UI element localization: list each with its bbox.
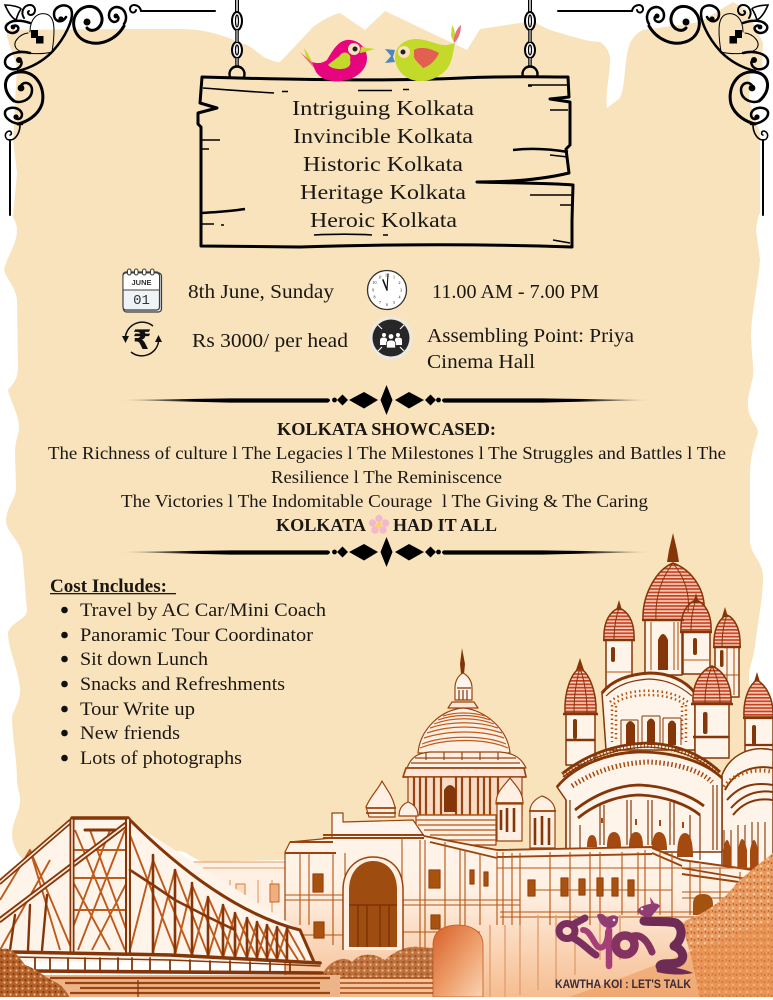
dome — [418, 708, 510, 753]
dome finials — [576, 533, 760, 682]
list items — [80, 600, 327, 769]
list items: Panoramic Tour Coordinator — [80, 625, 314, 646]
title text: Heroic Kolkata — [310, 208, 457, 232]
logo glyph: third letter — [616, 936, 652, 954]
spire and lantern — [460, 648, 465, 674]
railing and main body — [557, 752, 722, 852]
logo glyph: first letter — [559, 918, 596, 955]
list bullets — [61, 607, 68, 761]
white ground under the skyline — [0, 850, 773, 1000]
icon: clock: 9 — [372, 288, 374, 292]
trees left — [0, 949, 70, 998]
showcase text block: Resilience l The Reminiscence — [271, 467, 502, 487]
icon: rupee exchange — [122, 322, 162, 356]
stone pier — [433, 925, 483, 997]
building windows — [313, 870, 634, 938]
orange trees right — [680, 853, 773, 1000]
logo glyph: second letter — [583, 930, 609, 966]
corner ornament: top right — [558, 5, 768, 215]
title text: Intriguing Kolkata — [292, 96, 475, 120]
icon: clock: 6 — [386, 302, 388, 307]
annex — [722, 749, 773, 880]
lower left tower — [566, 713, 595, 765]
meeting point text: Cinema Hall — [427, 351, 535, 373]
shaded lower right wash — [560, 920, 773, 1000]
meeting point text: Assembling Point: Priya — [427, 325, 634, 347]
lower wall streaks — [490, 915, 620, 997]
Howrah bridge — [0, 818, 340, 998]
icon: clock: 11 — [378, 274, 382, 280]
hedge — [323, 947, 433, 978]
cost includes list — [50, 576, 327, 769]
list items: Snacks and Refreshments — [80, 674, 285, 695]
meeting point text — [427, 325, 634, 373]
tower detail lines — [606, 622, 739, 695]
tower windows — [611, 634, 724, 670]
title text: Historic Kolkata — [303, 152, 464, 176]
showcase text block: KOLKATA — [276, 515, 366, 535]
bird: pink — [300, 38, 375, 81]
icon: calendar — [123, 269, 162, 312]
temple windows and arches — [587, 818, 693, 857]
time text: 11.00 AM - 7.00 PM — [432, 281, 599, 303]
Dakshineswar temple — [557, 533, 773, 880]
water below the bridge — [40, 975, 340, 998]
logo: Kawtha Koi — [555, 897, 693, 991]
drum band — [407, 752, 526, 768]
wing walls — [285, 813, 753, 1000]
logo bird: large — [637, 897, 660, 917]
logo tagline: KAWTHA KOI : LET'S TALK — [555, 979, 692, 991]
river bands — [290, 978, 433, 993]
title text — [292, 96, 475, 232]
list items: Sit down Lunch — [80, 649, 209, 670]
illustration: Kolkata skyline — [0, 533, 773, 1000]
dome base rings — [603, 620, 741, 647]
divider: lower — [120, 537, 652, 567]
list items: New friends — [80, 723, 180, 744]
dome ribs — [614, 563, 727, 647]
date text: 8th June, Sunday — [188, 281, 335, 303]
hanging sign — [198, 0, 573, 247]
icon: rupee exchange: ₹ — [133, 325, 151, 356]
icon: clock: 12 — [385, 272, 389, 278]
showcase text block: HAD IT ALL — [393, 515, 497, 535]
showcase text block: The Victories l The Indomitable Courage l The Giving & The Caring — [121, 491, 648, 511]
bridge white panels — [0, 820, 313, 962]
far right tower — [745, 717, 773, 767]
icon: clock: 7 — [379, 300, 381, 305]
bottom fade band — [0, 997, 773, 1000]
central arch — [343, 857, 403, 950]
drum windows — [626, 718, 676, 745]
showcase text block: KOLKATA SHOWCASED: — [277, 419, 496, 439]
icon: blossom — [369, 515, 389, 534]
list items: Lots of photographs — [80, 748, 242, 769]
lower right tower — [695, 703, 729, 758]
icon: calendar: JUNE — [131, 278, 152, 287]
title text: Invincible Kolkata — [293, 124, 474, 148]
icon: clock: 1 — [393, 274, 395, 280]
upper domes — [604, 563, 740, 647]
logo glyph tail — [656, 966, 693, 975]
corner ornament: top left — [5, 5, 215, 215]
icon: clock: 5 — [393, 300, 395, 305]
chain: left — [230, 0, 244, 82]
logo bird: small — [597, 914, 618, 928]
icon: clock — [368, 270, 406, 310]
showcase text block — [48, 419, 726, 535]
price text: Rs 3000/ per head — [192, 330, 348, 352]
bridge lattice: thin members — [0, 830, 305, 960]
logo glyph: last letter — [644, 921, 683, 966]
title text: Heritage Kolkata — [300, 180, 467, 204]
list heading: Cost Includes: — [50, 576, 167, 597]
divider: upper — [120, 385, 652, 415]
icon: clock: 2 — [398, 280, 400, 285]
small turrets — [366, 778, 555, 848]
icon: clock: 4 — [398, 294, 400, 300]
Victoria Memorial — [285, 648, 753, 1000]
stepped base — [416, 815, 496, 845]
tower bodies — [606, 620, 739, 697]
list items: Travel by AC Car/Mini Coach — [80, 600, 327, 621]
icon: calendar: 01 — [133, 293, 150, 309]
list items: Tour Write up — [80, 699, 195, 720]
bridge lattice: heavy members — [0, 818, 322, 973]
bird: green — [385, 25, 461, 81]
sign board outline — [198, 77, 573, 247]
sign wood grain — [202, 85, 572, 243]
pale wing behind the bridge — [187, 862, 290, 952]
colonnade — [408, 777, 522, 815]
icon: clock: 8 — [374, 294, 376, 300]
chain: right — [522, 0, 538, 82]
icon: assembly point — [370, 316, 412, 360]
icon: clock: 10 — [372, 280, 376, 285]
showcase text block: The Richness of culture l The Legacies l The Milestones l The Struggles and Battles l The — [48, 443, 726, 463]
icon: clock: 3 — [400, 288, 402, 292]
middle drum — [602, 673, 695, 750]
